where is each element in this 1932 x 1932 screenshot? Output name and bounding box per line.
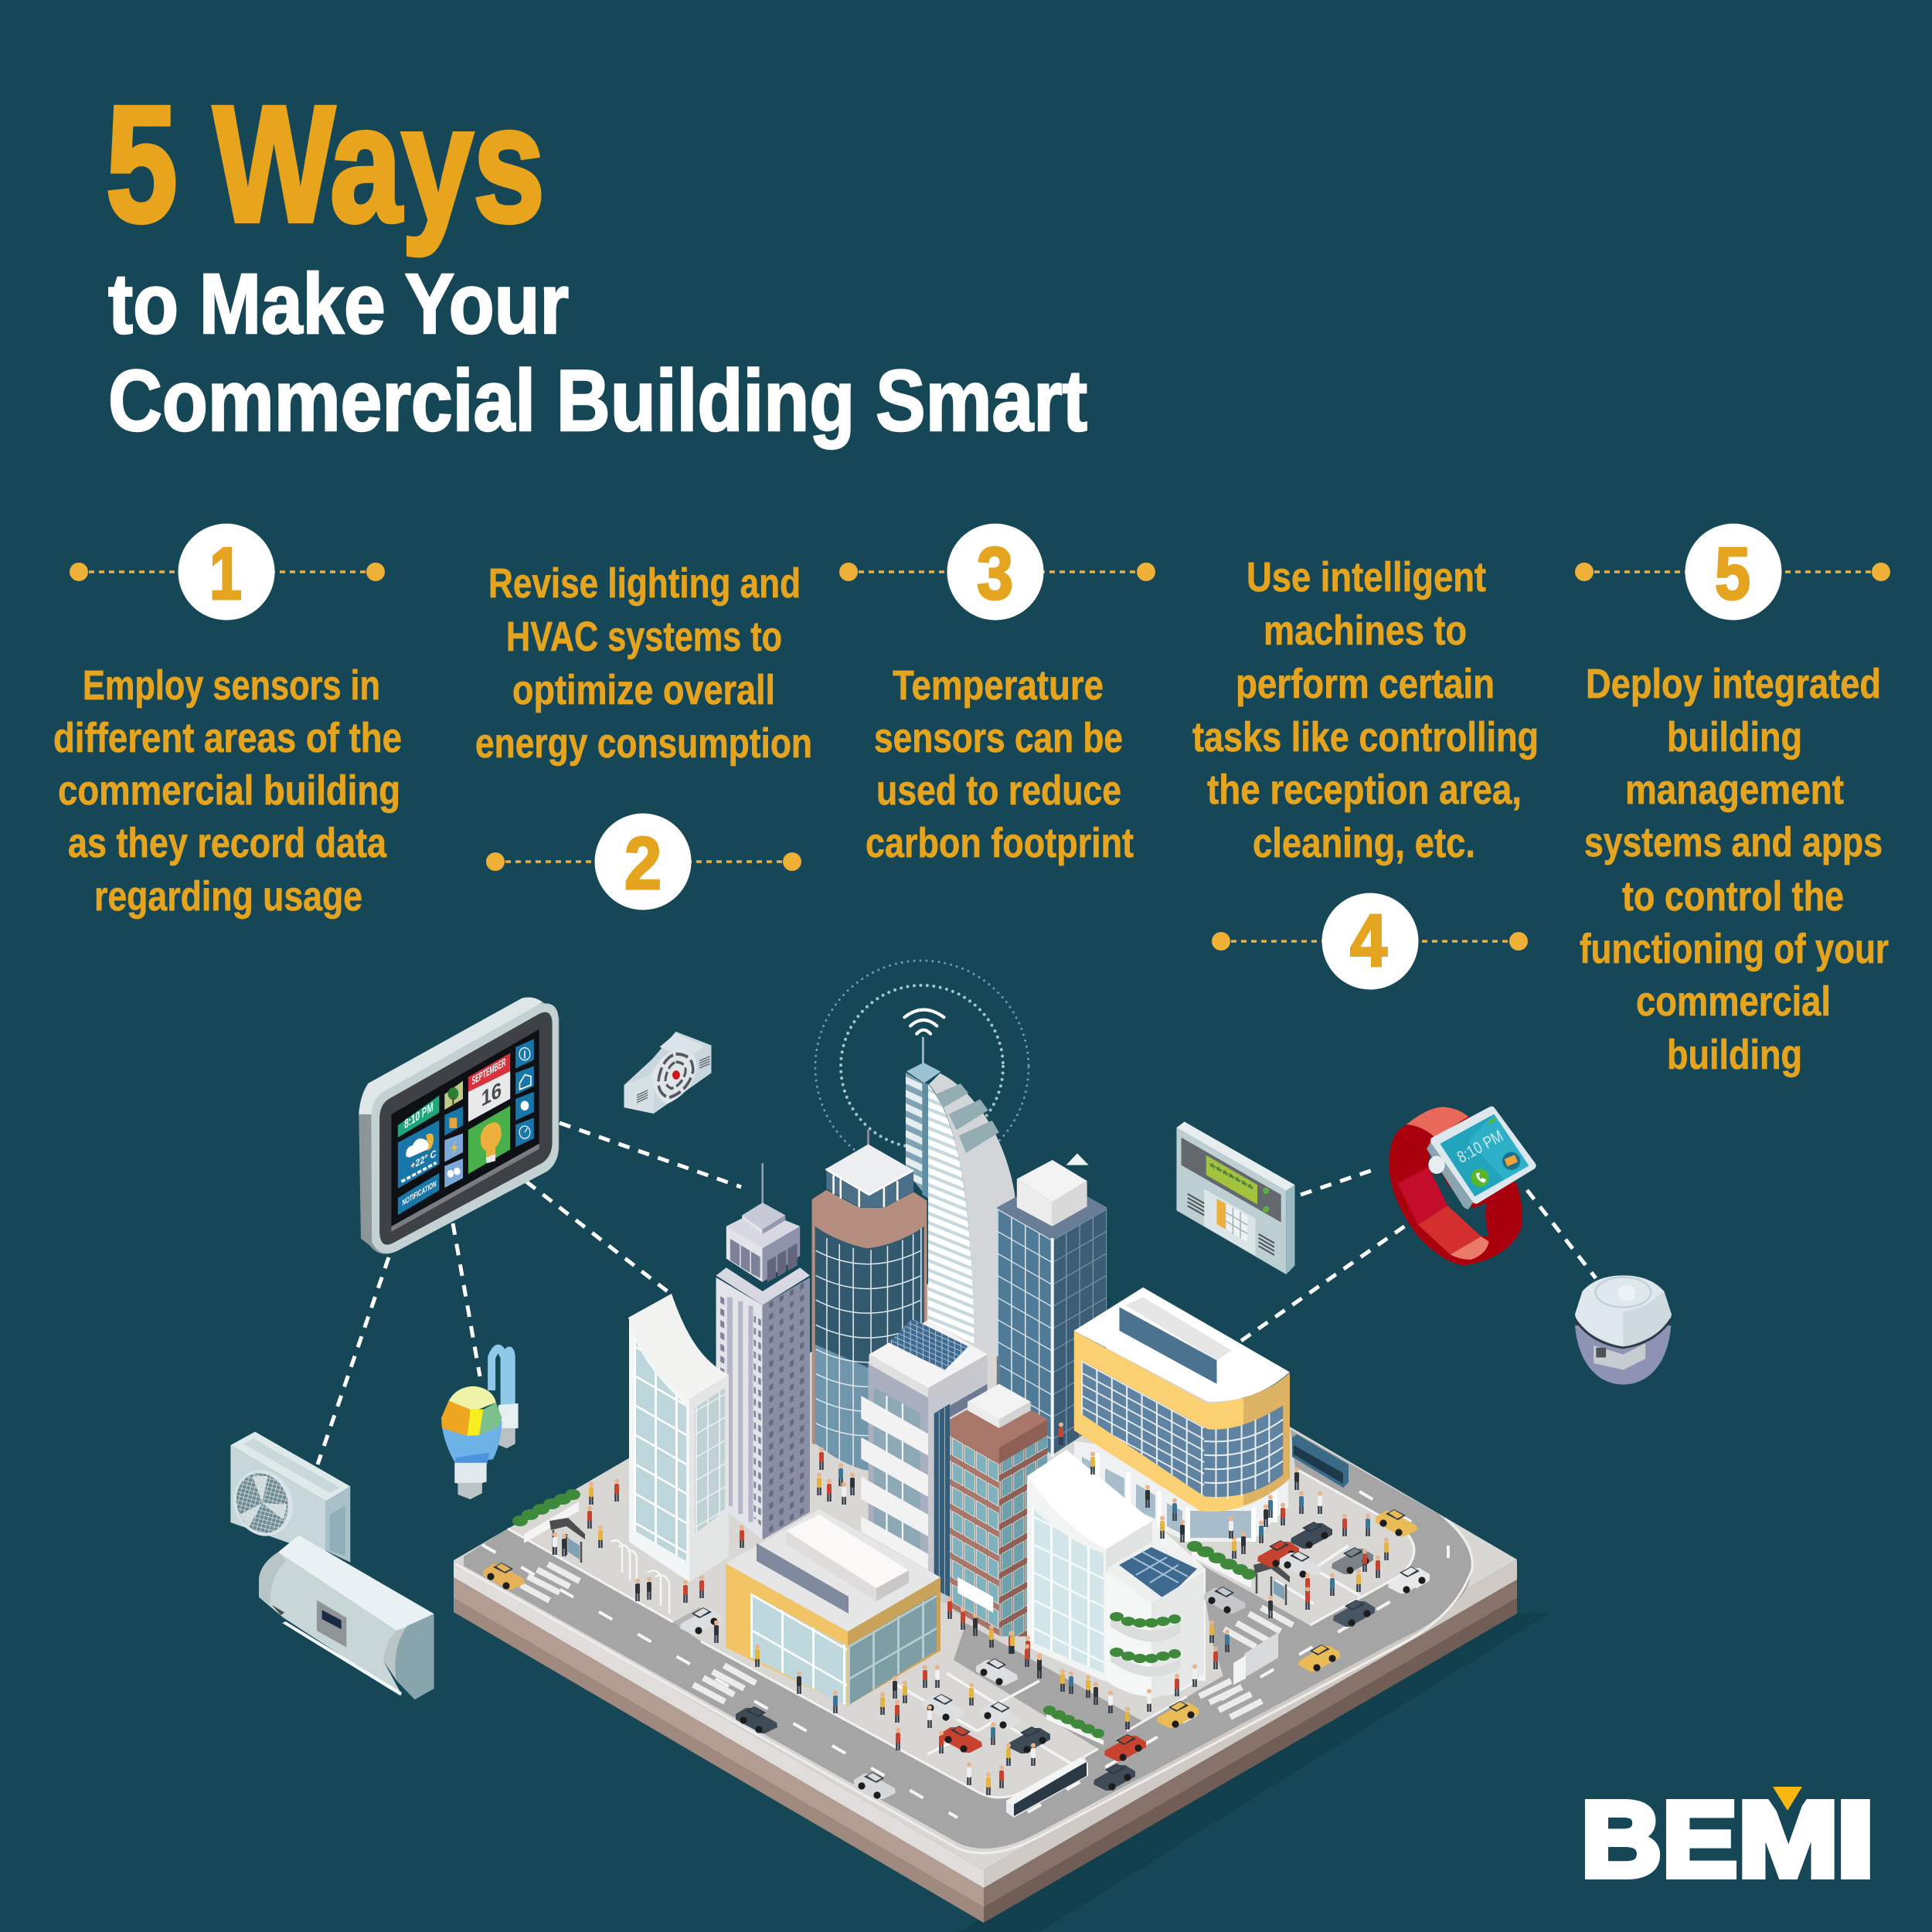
step 1 text: regarding usage bbox=[94, 873, 362, 920]
step 2 text: HVAC systems to bbox=[506, 614, 782, 660]
step 4 text: machines to bbox=[1264, 607, 1467, 654]
step 3 text: sensors can be bbox=[874, 715, 1123, 761]
icon: wifi bbox=[904, 1010, 944, 1034]
step 1 badge bbox=[70, 524, 385, 620]
step 2 text: Revise lighting and bbox=[488, 560, 801, 607]
step 5 text bbox=[1580, 661, 1889, 1078]
step 5 text: building bbox=[1667, 714, 1802, 760]
step 3 text: carbon footprint bbox=[866, 820, 1134, 866]
step 1 text: different areas of the bbox=[53, 715, 402, 761]
air conditioner outdoor unit bbox=[225, 1432, 350, 1563]
step 3 text: Temperature bbox=[893, 662, 1104, 709]
step 5 badge: 5 bbox=[1715, 532, 1750, 615]
building: yellow curved office bbox=[1074, 1287, 1290, 1542]
step 5 badge bbox=[1575, 524, 1890, 620]
building: brown curved tower bbox=[812, 1130, 927, 1471]
building: curved sail tower bbox=[906, 1037, 1015, 1364]
building: solar roof balcony block bbox=[861, 1319, 988, 1605]
building: white round block bbox=[1027, 1450, 1206, 1699]
wall tablet device: +22° C bbox=[410, 1148, 437, 1172]
step 2 text: optimize overall bbox=[512, 667, 775, 713]
logo: BEMI: E bbox=[1662, 1781, 1737, 1900]
buses and truck bbox=[1006, 1434, 1349, 1818]
logo: BEMI: B bbox=[1581, 1781, 1662, 1900]
step 1 text: commercial building bbox=[58, 767, 400, 814]
step 5 text: building bbox=[1667, 1032, 1802, 1078]
dashed connector lines bbox=[318, 1123, 1596, 1464]
wall tablet device: NOTIFICATION bbox=[403, 1179, 437, 1208]
step 1 text bbox=[53, 662, 402, 920]
step 2 text bbox=[475, 560, 812, 767]
roof marker triangle bbox=[1066, 1153, 1089, 1165]
building: grey stepped tower bbox=[716, 1163, 810, 1539]
step 4 text: perform certain bbox=[1236, 661, 1495, 707]
logo: BEMI: I bbox=[1836, 1781, 1875, 1900]
logo: BEMI bbox=[1581, 1781, 1875, 1900]
wall tablet device: SEPTEMBER bbox=[471, 1056, 505, 1088]
smoke sensor device bbox=[624, 1032, 711, 1114]
light bulbs bbox=[441, 1349, 519, 1499]
dome camera bbox=[1575, 1275, 1672, 1385]
air conditioner indoor unit bbox=[259, 1536, 434, 1699]
keypad control panel bbox=[1176, 1122, 1295, 1274]
roads bbox=[456, 1430, 1472, 1853]
title: Commercial Building Smart bbox=[108, 352, 1087, 449]
smart watch bbox=[1389, 1107, 1532, 1265]
building: left white glass tower bbox=[628, 1294, 729, 1582]
step 5 text: commercial bbox=[1636, 978, 1831, 1025]
smart watch: 8:10 PM bbox=[1454, 1127, 1506, 1167]
step 4 text bbox=[1192, 554, 1539, 866]
step 5 text: management bbox=[1625, 767, 1844, 813]
hedges and planters bbox=[512, 1489, 1256, 1745]
step 2 badge bbox=[486, 813, 801, 910]
platform shadow bbox=[958, 1613, 1549, 1932]
step 3 badge: 3 bbox=[977, 532, 1013, 615]
street lamps bbox=[611, 1540, 669, 1614]
step 3 badge bbox=[839, 524, 1155, 620]
step 4 text: the reception area, bbox=[1207, 767, 1522, 813]
logo: BEMI: M bbox=[1738, 1781, 1838, 1900]
title: 5 Ways bbox=[106, 72, 545, 257]
title: to Make Your bbox=[108, 257, 569, 352]
dotted signal circles bbox=[815, 961, 1029, 1174]
step 1 text: as they record data bbox=[68, 820, 387, 866]
city platform base bbox=[454, 1250, 1517, 1923]
step 3 text bbox=[866, 662, 1134, 866]
bus stops bbox=[549, 1518, 1290, 1605]
pedestrians bbox=[553, 1422, 1389, 1795]
step 4 text: tasks like controlling bbox=[1192, 714, 1539, 760]
step 3 text: used to reduce bbox=[876, 767, 1121, 814]
step 4 badge bbox=[1212, 893, 1528, 989]
wall tablet device: 8:10 PM bbox=[404, 1100, 434, 1132]
building: blue glass tower bbox=[997, 1160, 1107, 1457]
step 2 badge: 2 bbox=[624, 822, 662, 905]
building: brown brick tower bbox=[950, 1356, 1048, 1636]
step 4 text: cleaning, etc. bbox=[1253, 820, 1475, 866]
vehicles bbox=[483, 1509, 1430, 1799]
wall tablet device: 16 bbox=[481, 1077, 502, 1111]
step 2 text: energy consumption bbox=[475, 720, 812, 767]
step 4 text: Use intelligent bbox=[1247, 554, 1486, 600]
step 1 badge: 1 bbox=[209, 532, 242, 615]
step 4 badge: 4 bbox=[1350, 900, 1387, 982]
step 5 text: to control the bbox=[1622, 873, 1844, 920]
wall tablet device bbox=[359, 997, 559, 1254]
keypad control panel: ******* bbox=[1209, 1160, 1254, 1197]
title bbox=[106, 72, 1087, 449]
step 1 text: Employ sensors in bbox=[83, 662, 380, 709]
step 5 text: Deploy integrated bbox=[1586, 661, 1881, 707]
building: low yellow corner block bbox=[726, 1509, 940, 1706]
